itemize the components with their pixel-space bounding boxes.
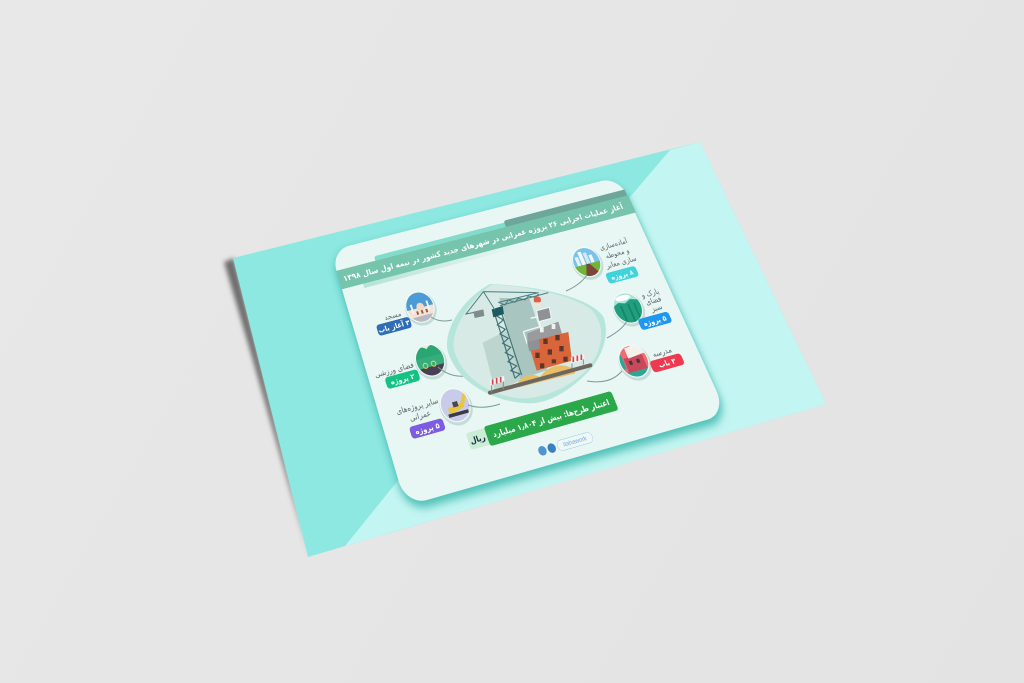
icon: excavator [434, 383, 478, 429]
icon: mosque [400, 287, 441, 329]
left barrier [490, 376, 505, 393]
panel: infographic card [330, 176, 727, 506]
badge: mosque start: ۳ آغاز باب [377, 318, 411, 335]
back building [483, 331, 522, 391]
crane cab [492, 306, 504, 317]
label: park [619, 287, 664, 317]
badge: 2 projects: ۲ پروژه [389, 372, 416, 387]
ground bar [490, 365, 590, 393]
crane jib [466, 292, 548, 314]
icon: road and city [572, 247, 604, 280]
label: site preparation: سازی معابر [605, 254, 638, 270]
badge: 8 projects: ۸ پروژه [609, 268, 635, 282]
badge: other 5 projects [409, 418, 446, 439]
crane mast [495, 313, 522, 378]
connector lines [431, 275, 627, 407]
label: site preparation: آماده‌سازی [598, 237, 629, 252]
blob outer [447, 284, 606, 403]
building windows [535, 335, 568, 368]
blob inner [454, 285, 601, 398]
callout: budget [484, 391, 619, 446]
icon: sports [414, 344, 448, 380]
logo wordmark: itahawork [562, 434, 588, 448]
white frame scaffolding [523, 317, 541, 344]
counterweight [473, 309, 484, 318]
badge: 3 buildings: ۳ باب [657, 356, 677, 369]
label: site preparation: و محوطه [604, 246, 631, 260]
top strip dark accent [503, 190, 627, 228]
label: park: فضای [644, 295, 663, 307]
logo [538, 432, 594, 456]
tall building [499, 298, 547, 379]
logo mark two [546, 442, 557, 454]
icons [405, 247, 652, 426]
grey corner block [527, 339, 540, 351]
label: mosque: مسجد [383, 309, 402, 322]
red building [528, 332, 572, 371]
sheet base [233, 142, 826, 557]
illustration group [447, 284, 606, 403]
sheet shadow [224, 258, 309, 556]
title: آغاز عملیات اجرایی ۲۶ پروژه عمرانی در شهرهای جدید کشور در نیمه اول سال ۱۳۹۸ [342, 202, 624, 283]
badge: 5 projects: ۵ پروژه [642, 314, 668, 328]
callout: rial unit [466, 428, 490, 450]
logo mark one [537, 445, 548, 456]
callout: rial unit: ریال [469, 432, 487, 446]
badge: 2 projects [384, 369, 421, 389]
sand piles [517, 365, 575, 387]
label: other projects: سایر پروژه‌های [395, 396, 439, 416]
label: park: سبز [649, 302, 664, 313]
top windows [540, 324, 555, 332]
title band [337, 195, 636, 289]
label: other projects: عمرانی [408, 408, 432, 423]
badge: 8 projects [605, 266, 639, 284]
label: sports: فضای ورزشی [374, 360, 415, 379]
label: park: پارک و [640, 287, 660, 300]
badge: 5 projects [637, 311, 673, 330]
icon: park [612, 292, 646, 326]
badge: 3 buildings [649, 353, 685, 373]
label: site preparation [598, 237, 638, 270]
right barrier [571, 354, 585, 368]
logo wordmark [556, 431, 595, 452]
under-band strip [363, 243, 519, 288]
badge: other 5 projects: ۵ پروژه [414, 421, 441, 436]
icon: school [618, 344, 652, 381]
sheet light fold [345, 142, 826, 546]
top strip accent [374, 222, 508, 261]
label: school: مدرسه [651, 345, 673, 359]
callout: budget: اعتبار طرح‌ها: بیش از ۱٫۸۰۴ میلیارد [491, 398, 611, 439]
grey floor [527, 322, 562, 344]
hook and worker [534, 296, 551, 322]
